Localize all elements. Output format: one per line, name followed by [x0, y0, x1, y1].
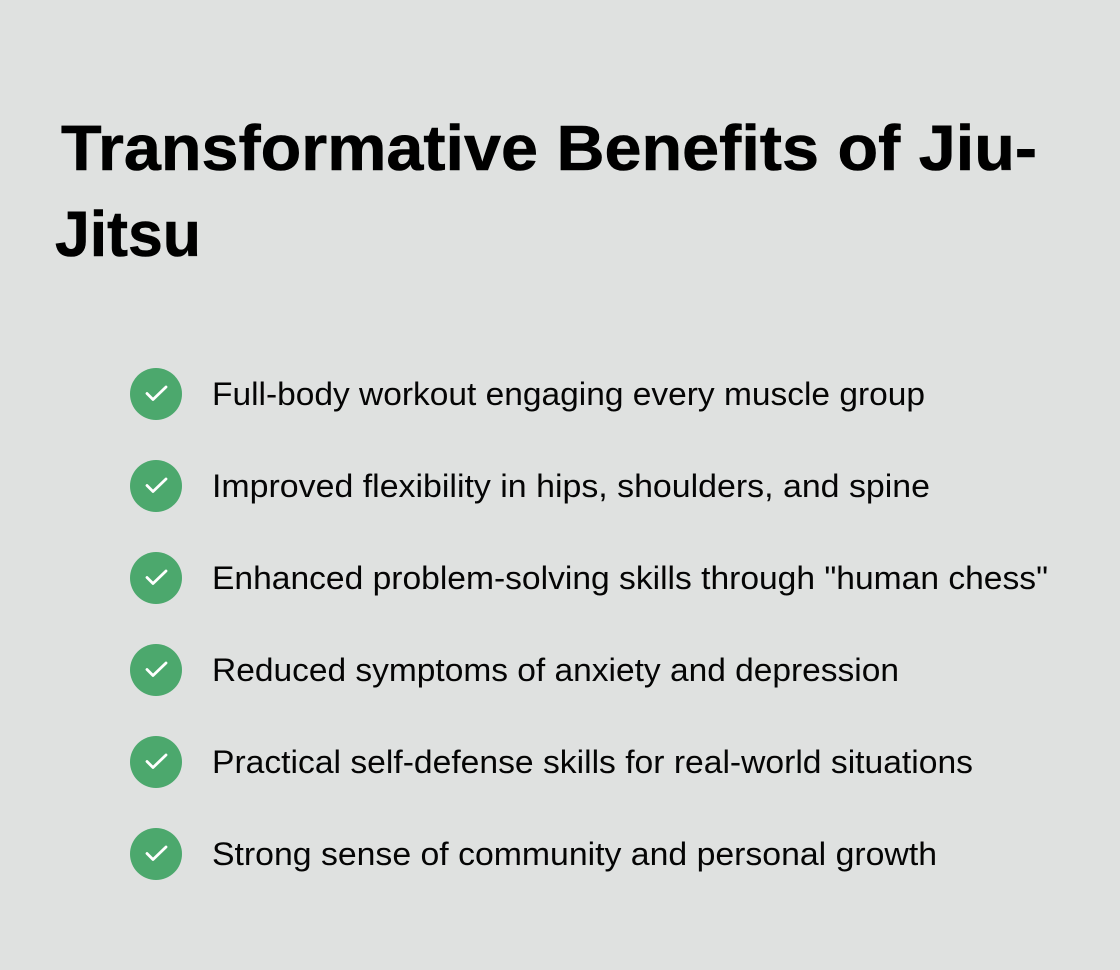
label: problem-solving: Enhanced problem-solving skills through "human chess"	[212, 560, 1048, 596]
label: flexibility: Improved flexibility in hips, shoulders, and spine	[212, 468, 930, 504]
item: flexibility	[130, 460, 930, 512]
item: community	[130, 828, 937, 880]
icon: check circle	[130, 460, 182, 512]
icon: check circle	[130, 736, 182, 788]
label: community: Strong sense of community and personal growth	[212, 836, 937, 872]
item: self-defense	[130, 736, 973, 788]
item: anxiety and depression	[130, 644, 899, 696]
item: full-body workout	[130, 368, 925, 420]
benefits checklist	[130, 368, 1048, 880]
title: Transformative Benefits of Jiu-	[61, 112, 1037, 184]
label: anxiety and depression: Reduced symptoms of anxiety and depression	[212, 652, 899, 688]
icon: check circle	[130, 368, 182, 420]
title	[55, 112, 1037, 270]
item: problem-solving	[130, 552, 1048, 604]
icon: check circle	[130, 644, 182, 696]
icon: check circle	[130, 828, 182, 880]
title: Jitsu	[55, 198, 201, 270]
icon: check circle	[130, 552, 182, 604]
label: self-defense: Practical self-defense skills for real-world situations	[212, 744, 973, 780]
label: full-body workout: Full-body workout engaging every muscle group	[212, 376, 925, 412]
